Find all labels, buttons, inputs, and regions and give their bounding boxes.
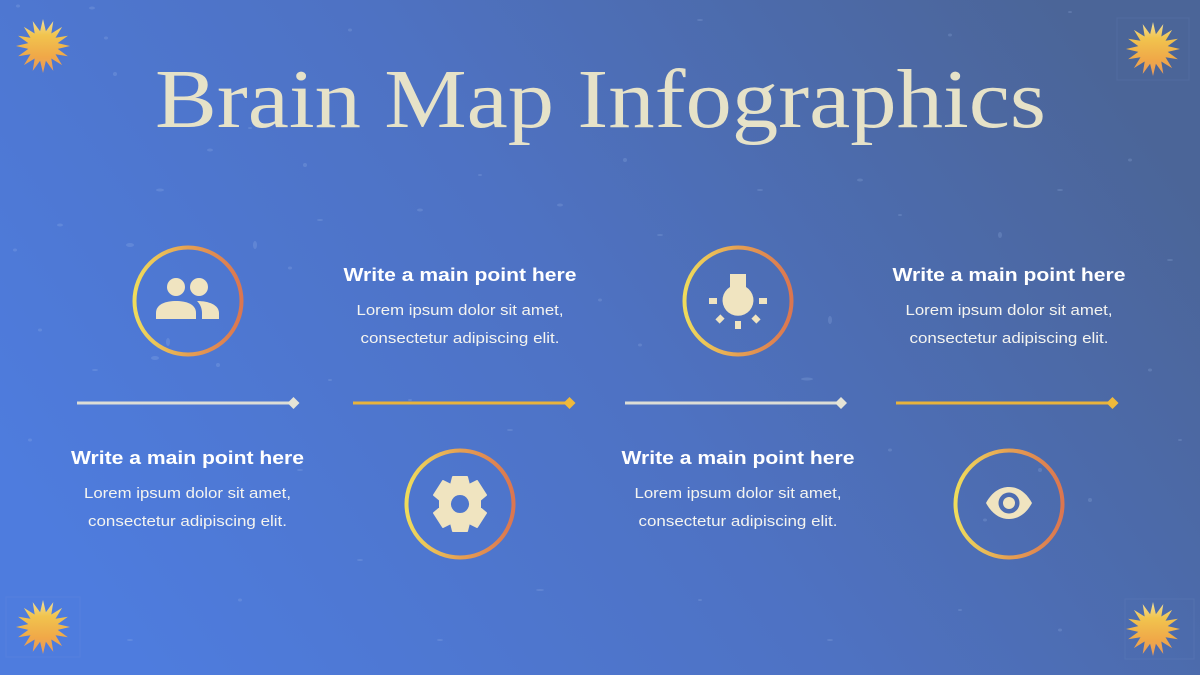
text block 4: Lorem ipsum dolor sit amet, — [906, 302, 1112, 319]
panel: step 4 — [892, 264, 1126, 558]
arrow line 2 — [353, 397, 576, 409]
text block 1 — [71, 447, 304, 530]
text block 1: Lorem ipsum dolor sit amet, — [84, 485, 291, 502]
decoration: star bottom left — [6, 597, 80, 657]
arrow line 4 — [896, 397, 1118, 409]
decoration: star bottom right — [1125, 599, 1194, 659]
decoration: star top left — [16, 19, 70, 73]
icon: gear — [406, 450, 514, 558]
text block 2 — [344, 264, 576, 347]
text block 4: consectetur adipiscing elit. — [910, 330, 1108, 347]
text block 2: Write a main point here — [344, 264, 576, 285]
decoration: star top right — [1117, 18, 1189, 80]
text block 2: Lorem ipsum dolor sit amet, — [356, 302, 564, 319]
text block 3: Write a main point here — [622, 447, 854, 468]
text block 4: Write a main point here — [892, 264, 1126, 285]
text block 3: consectetur adipiscing elit. — [638, 513, 838, 530]
panel: step 1 — [71, 248, 304, 530]
panel: step 3 — [622, 248, 854, 530]
text block 3 — [622, 447, 854, 530]
icon: light bulb — [684, 248, 792, 354]
arrow line 3 — [625, 397, 847, 409]
text block 2: consectetur adipiscing elit. — [360, 330, 560, 347]
icon: people — [134, 248, 242, 354]
icon: eye — [956, 450, 1062, 558]
text block 1: Write a main point here — [71, 447, 304, 468]
text block 3: Lorem ipsum dolor sit amet, — [634, 485, 842, 502]
title: Brain Map Infographics — [155, 53, 1046, 146]
text block 1: consectetur adipiscing elit. — [88, 513, 287, 530]
text block 4 — [892, 264, 1126, 347]
panel: step 2 — [344, 264, 576, 558]
arrow line 1 — [77, 397, 300, 409]
